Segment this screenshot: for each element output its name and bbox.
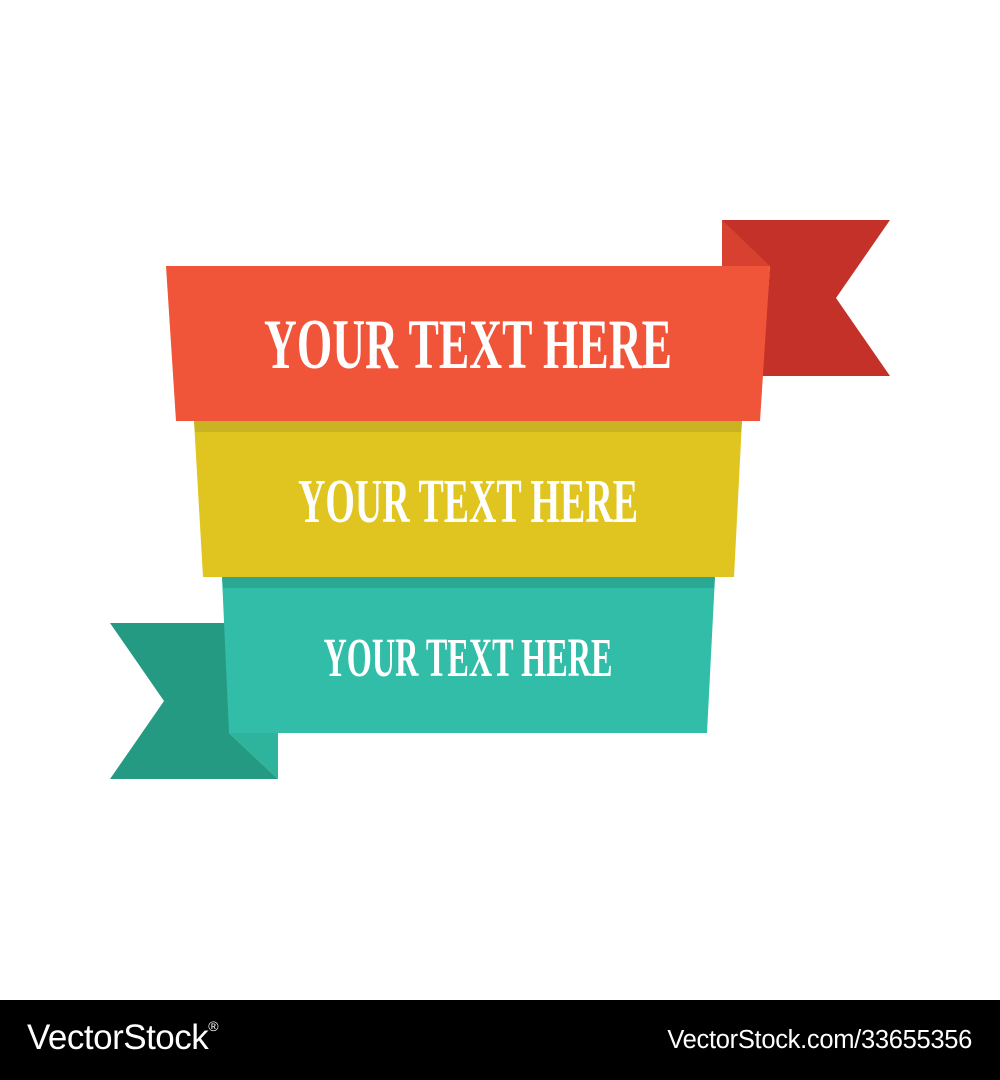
brand text: VectorStock® [27,1018,218,1057]
url text: VectorStock.com/33655356 [667,1026,972,1054]
band: red [166,266,770,421]
text: red band: YOUR TEXT HERE [264,306,672,384]
band: teal [222,577,715,733]
text: yellow band: YOUR TEXT HERE [298,468,638,536]
band: yellow [194,421,742,577]
teal flag tail [110,623,278,779]
footer bar [0,1000,1000,1080]
text: teal band: YOUR TEXT HERE [324,627,612,688]
red flag tail [722,220,890,376]
